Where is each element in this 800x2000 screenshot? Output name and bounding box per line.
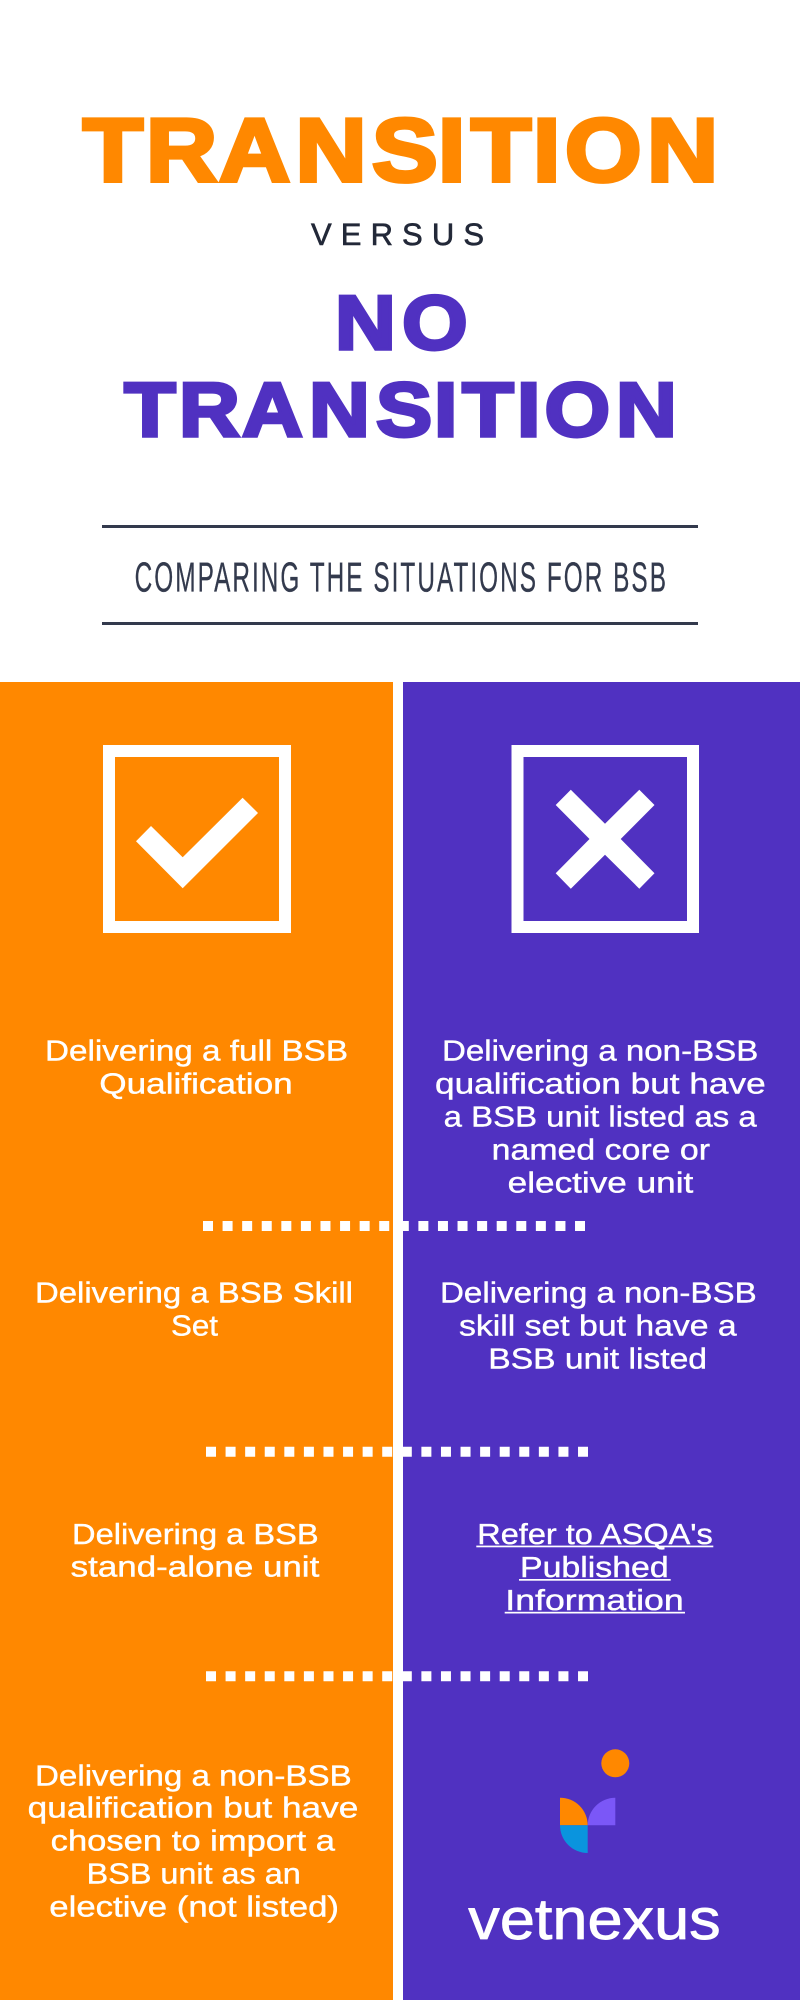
icon: cross in box xyxy=(518,751,693,927)
text: BSB skill set xyxy=(35,1278,353,1343)
text: non-BSB qualification importing a BSB elective xyxy=(28,1760,358,1923)
text: BSB skill set: Set xyxy=(171,1311,218,1343)
text: full BSB qualification: Qualification xyxy=(99,1069,293,1101)
text: non-BSB qualification importing a BSB elective: elective (not listed) xyxy=(49,1891,339,1923)
text: non-BSB qualification importing a BSB elective: qualification but have xyxy=(28,1793,358,1825)
link text: refer to ASQA's published information: Information xyxy=(505,1585,684,1617)
text: non-BSB qualification importing a BSB elective: BSB unit as an xyxy=(87,1859,301,1891)
dotted divider 3 xyxy=(206,1671,588,1681)
wordmark: vetnexus xyxy=(468,1887,721,1952)
panel: transition (orange) xyxy=(0,682,393,2000)
text: full BSB qualification xyxy=(45,1036,348,1101)
text: non-BSB skill set with listed BSB unit: Delivering a non-BSB xyxy=(440,1278,757,1310)
link text: refer to ASQA's published information: Refer to ASQA's xyxy=(477,1519,713,1551)
text: BSB stand-alone unit xyxy=(71,1519,319,1584)
link text: refer to ASQA's published information: Published xyxy=(520,1552,669,1584)
title: Transition: TRANSITION xyxy=(83,100,718,200)
title: No Transition: NO xyxy=(335,281,468,366)
text: non-BSB skill set with listed BSB unit: BSB unit listed xyxy=(488,1344,707,1376)
text: non-BSB qualification with listed BSB unit: named core or xyxy=(492,1135,710,1167)
text: non-BSB skill set with listed BSB unit: skill set but have a xyxy=(459,1311,738,1343)
text: non-BSB qualification with listed BSB unit: Delivering a non-BSB xyxy=(442,1036,758,1068)
text: non-BSB qualification with listed BSB unit: qualification but have xyxy=(435,1069,766,1101)
heading: comparing the situations, between rules: COMPARING THE SITUATIONS FOR BSB xyxy=(135,553,666,600)
text: full BSB qualification: Delivering a full BSB xyxy=(45,1036,348,1068)
dotted divider 2 xyxy=(206,1447,588,1457)
panel: no transition (purple) xyxy=(403,682,800,2000)
text: non-BSB qualification importing a BSB elective: chosen to import a xyxy=(51,1826,336,1858)
subtitle: versus: VERSUS xyxy=(311,217,484,252)
title: No Transition xyxy=(124,281,677,453)
dotted divider 1 xyxy=(203,1221,585,1231)
text: non-BSB qualification with listed BSB unit: elective unit xyxy=(508,1168,693,1200)
text: non-BSB qualification importing a BSB elective: Delivering a non-BSB xyxy=(35,1760,352,1792)
icon: check mark in box xyxy=(109,751,285,927)
text: BSB stand-alone unit: stand-alone unit xyxy=(71,1552,319,1584)
title: No Transition: TRANSITION xyxy=(124,368,677,453)
text: BSB stand-alone unit: Delivering a BSB xyxy=(72,1519,319,1551)
icon: vetnexus mark xyxy=(560,1749,629,1853)
text: non-BSB qualification with listed BSB unit xyxy=(435,1036,766,1200)
text: non-BSB skill set with listed BSB unit xyxy=(440,1278,757,1376)
logo: vetnexus xyxy=(468,1749,721,1952)
link text: refer to ASQA's published information xyxy=(476,1519,713,1617)
heading: comparing the situations, between rules xyxy=(102,525,698,625)
text: BSB skill set: Delivering a BSB Skill xyxy=(35,1278,353,1310)
text: non-BSB qualification with listed BSB unit: a BSB unit listed as a xyxy=(444,1102,758,1134)
